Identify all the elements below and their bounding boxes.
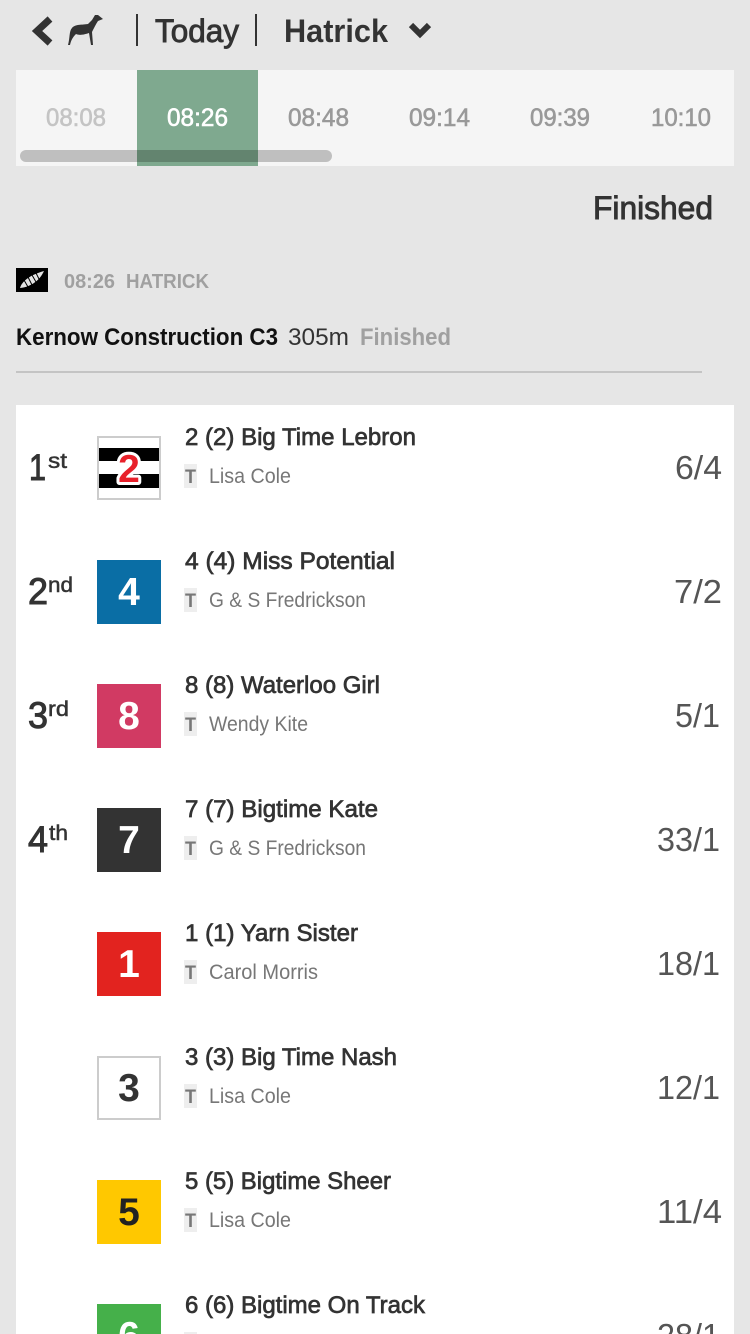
row: 4th <box>28 796 720 872</box>
selected tab <box>137 70 258 166</box>
row: 1st: 2 (2) Big Time Lebron <box>185 424 416 451</box>
row: 4th: 33/1 <box>657 821 720 858</box>
runner box 3 <box>98 1057 160 1119</box>
header bar <box>37 13 429 49</box>
row: 4th: 7 (7) Bigtime Kate <box>185 796 378 823</box>
race title: 305m <box>288 324 349 351</box>
row: Big Time Nash: T <box>185 1087 196 1108</box>
row: 3rd: 8 (8) Waterloo Girl <box>185 672 380 699</box>
row: Bigtime On Track <box>97 1292 720 1334</box>
runner box 4 <box>97 560 161 624</box>
runner box 1: 1 <box>118 943 140 986</box>
row: 2nd: T <box>185 591 196 612</box>
row: 3rd <box>28 672 720 748</box>
runner box 2 <box>98 437 160 499</box>
icon: back chevron <box>37 19 50 43</box>
row: 2nd <box>28 548 722 624</box>
row: Big Time Nash: 12/1 <box>657 1069 720 1106</box>
row: Big Time Nash <box>98 1044 720 1119</box>
runner box 1 <box>97 932 161 996</box>
row: Bigtime Sheer: T <box>185 1211 196 1232</box>
runner box 7 <box>97 808 161 872</box>
row: 2nd: 2 <box>28 571 48 612</box>
row: Bigtime Sheer: 11/4 <box>657 1193 722 1230</box>
row: 2nd: 7/2 <box>674 573 722 610</box>
row: 1st: 1 <box>29 447 46 488</box>
text: time and track: 08:26 <box>64 271 115 293</box>
runner box 5: 5 <box>118 1191 140 1234</box>
row: 2nd: G & S Fredrickson <box>209 589 366 612</box>
divider left of Today <box>136 14 138 46</box>
race meta line <box>16 268 210 293</box>
row: 2nd: 4 (4) Miss Potential <box>185 548 395 575</box>
label: Hatrick: Hatrick <box>284 13 388 49</box>
runner box 8: 8 <box>118 695 140 738</box>
tab: 09:39: 09:39 <box>530 104 590 132</box>
row: 3rd: 3 <box>28 695 48 736</box>
runner box 3: 3 <box>118 1067 140 1110</box>
row: Yarn Sister <box>97 920 720 996</box>
tab: 10:10: 10:10 <box>651 104 711 132</box>
tab: 09:14: 09:14 <box>409 104 470 132</box>
race title: Finished <box>360 324 451 351</box>
label: Today: Today <box>155 13 239 49</box>
row: 4th: T <box>185 839 196 860</box>
race time tabs <box>16 70 734 166</box>
text: time and track <box>64 271 210 293</box>
row: 1st <box>29 424 722 499</box>
race title <box>16 324 451 351</box>
row: Yarn Sister: 18/1 <box>657 945 720 982</box>
tab: 08:08: 08:08 <box>46 104 106 132</box>
runner box 7: 7 <box>118 819 140 862</box>
row: 3rd: Wendy Kite <box>209 713 308 736</box>
text: time and track: HATRICK <box>126 271 210 293</box>
runner box 2: 2 <box>118 448 140 491</box>
row: Yarn Sister: 1 (1) Yarn Sister <box>185 920 358 947</box>
row: Big Time Nash: Lisa Cole <box>209 1085 291 1108</box>
row: 1st: Lisa Cole <box>209 465 291 488</box>
panel: results list <box>16 405 734 1334</box>
tab: 08:26: 08:26 <box>167 104 228 132</box>
row: Bigtime On Track: 6 (6) Bigtime On Track <box>185 1292 426 1319</box>
row: 3rd: T <box>185 715 196 736</box>
scrollbar <box>20 150 332 162</box>
divider right of Today <box>255 14 257 46</box>
icon: dropdown chevron <box>411 25 429 34</box>
runner box 8 <box>97 684 161 748</box>
row: 3rd: 5/1 <box>675 697 720 734</box>
row: Yarn Sister: Carol Morris <box>209 961 318 984</box>
row: Bigtime Sheer: Lisa Cole <box>209 1209 291 1232</box>
row: 4th: 4 <box>28 819 48 860</box>
icon: silver fern flag <box>16 268 48 292</box>
row: Bigtime Sheer <box>97 1168 722 1244</box>
race title: Kernow Construction C3 <box>16 324 278 351</box>
row: 4th: th <box>49 822 68 845</box>
runner box 6 <box>97 1304 161 1334</box>
row: 2nd: nd <box>48 574 73 597</box>
icon: greyhound silhouette <box>68 15 103 45</box>
row: 3rd: rd <box>48 698 69 721</box>
status: Finished: Finished <box>593 190 713 226</box>
tab: 08:48: 08:48 <box>288 104 349 132</box>
row: 1st: 6/4 <box>675 449 722 486</box>
row: 1st: st <box>48 450 67 473</box>
row: 4th: G & S Fredrickson <box>209 837 366 860</box>
row: Big Time Nash: 3 (3) Big Time Nash <box>185 1044 397 1071</box>
runner box 4: 4 <box>118 571 140 614</box>
row: 1st: T <box>185 467 196 488</box>
row: Yarn Sister: T <box>185 963 196 984</box>
runner box 5 <box>97 1180 161 1244</box>
row: Bigtime Sheer: 5 (5) Bigtime Sheer <box>185 1168 391 1195</box>
